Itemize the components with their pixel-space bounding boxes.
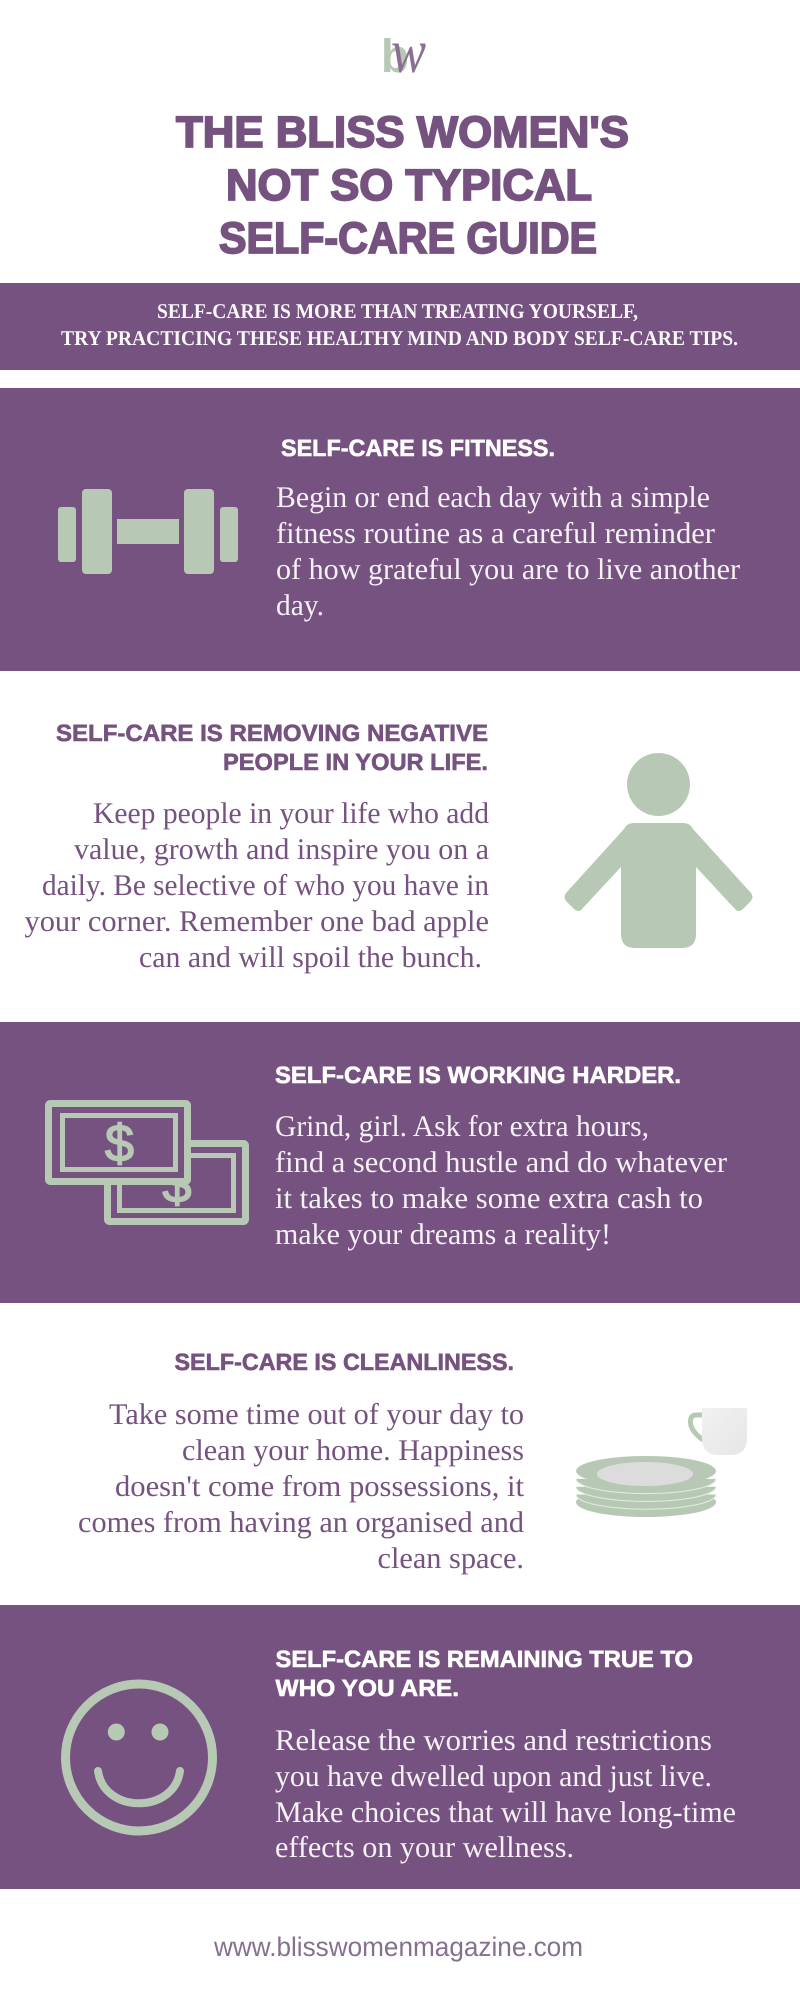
text: negative people body xyxy=(24,797,489,974)
text: cleanliness body: doesn't come from possessions, it xyxy=(115,1470,525,1503)
text: remaining true body: Release the worries and restrictions xyxy=(275,1724,712,1757)
title: THE BLISS WOMEN'S xyxy=(176,108,629,157)
text: cleanliness body: comes from having an organised and xyxy=(78,1506,524,1539)
text: remaining true body: Make choices that will have long-time xyxy=(275,1796,736,1829)
heading: fitness: SELF-CARE IS FITNESS. xyxy=(281,435,555,461)
heading: negative people: SELF-CARE IS REMOVING NEGATIVE xyxy=(56,720,488,746)
heading: remaining true: SELF-CARE IS REMAINING TRUE TO xyxy=(276,1646,693,1672)
footer url: www.blisswomenmagazine.com xyxy=(213,1932,583,1962)
panel: working harder xyxy=(0,1022,800,1303)
text: working harder body: find a second hustle and do whatever xyxy=(275,1146,727,1179)
text: working harder body: Grind, girl. Ask for extra hours, xyxy=(275,1110,649,1143)
text: cleanliness body: Take some time out of your day to xyxy=(109,1398,524,1431)
text: working harder body xyxy=(275,1110,727,1251)
title: NOT SO TYPICAL xyxy=(226,161,592,210)
panel: fitness xyxy=(0,388,800,671)
panel: intro banner: SELF-CARE IS MORE THAN TREATING YOURSELF, xyxy=(157,299,638,323)
logo: w xyxy=(391,18,426,86)
text: remaining true body: you have dwelled upon and just live. xyxy=(275,1760,712,1793)
text: negative people body: your corner. Remember one bad apple xyxy=(24,905,489,938)
text: cleanliness body xyxy=(78,1398,525,1575)
text: fitness body: Begin or end each day with a simple xyxy=(276,481,710,514)
icon: plates and cup xyxy=(576,1408,747,1517)
icon: banknotes: $ xyxy=(105,1115,134,1173)
logo xyxy=(381,18,426,86)
icon: smiley face xyxy=(66,1684,212,1831)
title xyxy=(176,108,629,263)
icon: dumbbell xyxy=(58,489,238,574)
icon: banknotes: $ xyxy=(163,1156,192,1214)
text: working harder body: make your dreams a reality! xyxy=(275,1218,611,1251)
text: fitness body: of how grateful you are to live another xyxy=(276,553,740,586)
panel: remaining true xyxy=(0,1605,800,1889)
text: cleanliness body: clean your home. Happiness xyxy=(182,1434,524,1467)
text: remaining true body xyxy=(275,1724,736,1864)
text: negative people body: daily. Be selective of who you have in xyxy=(42,869,489,902)
text: negative people body: value, growth and inspire you on a xyxy=(74,833,489,866)
heading: cleanliness: SELF-CARE IS CLEANLINESS. xyxy=(174,1349,514,1375)
text: negative people body: can and will spoil the bunch. xyxy=(139,941,482,974)
text: fitness body xyxy=(276,481,740,622)
icon: person xyxy=(564,753,752,948)
icon: banknotes xyxy=(48,1104,246,1222)
panel: intro banner xyxy=(0,283,800,370)
logo: b xyxy=(381,29,409,82)
text: cleanliness body: clean space. xyxy=(378,1542,524,1575)
panel: intro banner: TRY PRACTICING THESE HEALTHY MIND AND BODY SELF-CARE TIPS. xyxy=(61,326,738,350)
text: fitness body: fitness routine as a careful reminder xyxy=(276,517,715,550)
text: negative people body: Keep people in your life who add xyxy=(93,797,489,830)
text: working harder body: it takes to make some extra cash to xyxy=(275,1182,703,1215)
title: SELF-CARE GUIDE xyxy=(219,214,597,263)
heading: remaining true: WHO YOU ARE. xyxy=(276,1675,459,1701)
heading: working harder: SELF-CARE IS WORKING HARDER. xyxy=(275,1062,681,1088)
panel: removing negative people xyxy=(24,720,752,974)
text: remaining true body: effects on your wellness. xyxy=(275,1831,574,1864)
heading: remaining true xyxy=(276,1646,693,1701)
heading: negative people: PEOPLE IN YOUR LIFE. xyxy=(223,749,488,775)
text: fitness body: day. xyxy=(276,589,324,622)
heading: negative people xyxy=(56,720,488,775)
panel: cleanliness xyxy=(78,1349,747,1575)
